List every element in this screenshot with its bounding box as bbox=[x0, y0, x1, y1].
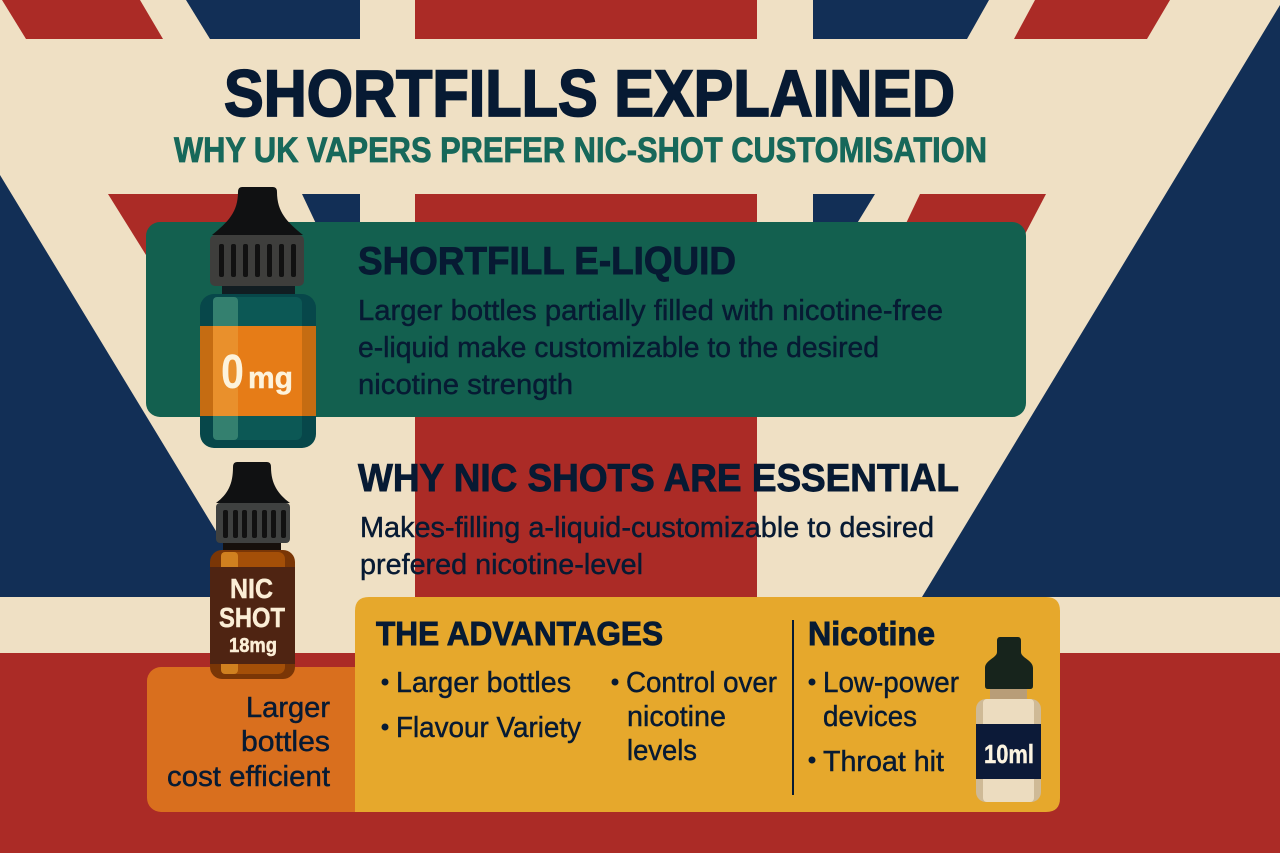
panel: larger bottles cost efficient: bottles bbox=[241, 726, 330, 758]
title: SHORTFILLS EXPLAINED bbox=[224, 56, 955, 130]
icon: 0mg shortfill bottle: mg bbox=[248, 360, 293, 395]
text: nic shots description: prefered nicotine-level bbox=[360, 549, 643, 581]
heading: shortfill e-liquid: SHORTFILL E-LIQUID bbox=[358, 240, 736, 283]
heading: why nic shots are essential: WHY NIC SHOTS ARE ESSENTIAL bbox=[358, 457, 959, 500]
list: advantages: nicotine bbox=[627, 701, 726, 733]
icon: nic shot 18mg bottle: NIC bbox=[230, 573, 273, 604]
heading: nicotine: Nicotine bbox=[808, 615, 935, 652]
list: nicotine bbox=[808, 667, 959, 778]
icon: 0mg shortfill bottle: 0 bbox=[221, 346, 244, 399]
list: advantages: Larger bottles bbox=[396, 667, 571, 699]
list: nicotine: Low-power bbox=[823, 667, 959, 699]
text: shortfill description bbox=[358, 295, 943, 401]
text: shortfill description: e-liquid make customizable to the desired bbox=[358, 332, 879, 364]
icon: nic shot 18mg bottle: SHOT bbox=[219, 602, 285, 633]
subtitle: WHY UK VAPERS PREFER NIC-SHOT CUSTOMISATION bbox=[174, 131, 987, 170]
text: nic shots description: Makes-filling a-liquid-customizable to desired bbox=[360, 512, 934, 544]
icon: 10ml bottle bbox=[976, 637, 1041, 802]
icon: 10ml bottle: 10ml bbox=[984, 739, 1034, 769]
list: nicotine: Throat hit bbox=[823, 746, 944, 778]
panel: larger bottles cost efficient: Larger bbox=[246, 692, 330, 724]
list: nicotine: devices bbox=[823, 701, 917, 733]
icon: nic shot 18mg bottle bbox=[210, 462, 295, 679]
panel: shortfill e-liquid bbox=[146, 222, 1026, 417]
list: advantages: Control over bbox=[626, 667, 777, 699]
icon: nic shot 18mg bottle: 18mg bbox=[229, 635, 277, 657]
panel: larger bottles cost efficient bbox=[147, 667, 377, 812]
panel: larger bottles cost efficient: cost efficient bbox=[167, 761, 330, 793]
list: advantages: levels bbox=[627, 735, 697, 767]
text: shortfill description: Larger bottles partially filled with nicotine-free bbox=[358, 295, 943, 327]
text: shortfill description: nicotine strength bbox=[358, 369, 573, 401]
list: advantages: Flavour Variety bbox=[396, 712, 581, 744]
list: advantages bbox=[382, 667, 777, 767]
heading: the advantages: THE ADVANTAGES bbox=[376, 615, 663, 652]
text: nic shots description bbox=[360, 512, 934, 581]
icon: 0mg shortfill bottle bbox=[200, 187, 316, 448]
panel: the advantages and nicotine bbox=[355, 597, 1060, 812]
